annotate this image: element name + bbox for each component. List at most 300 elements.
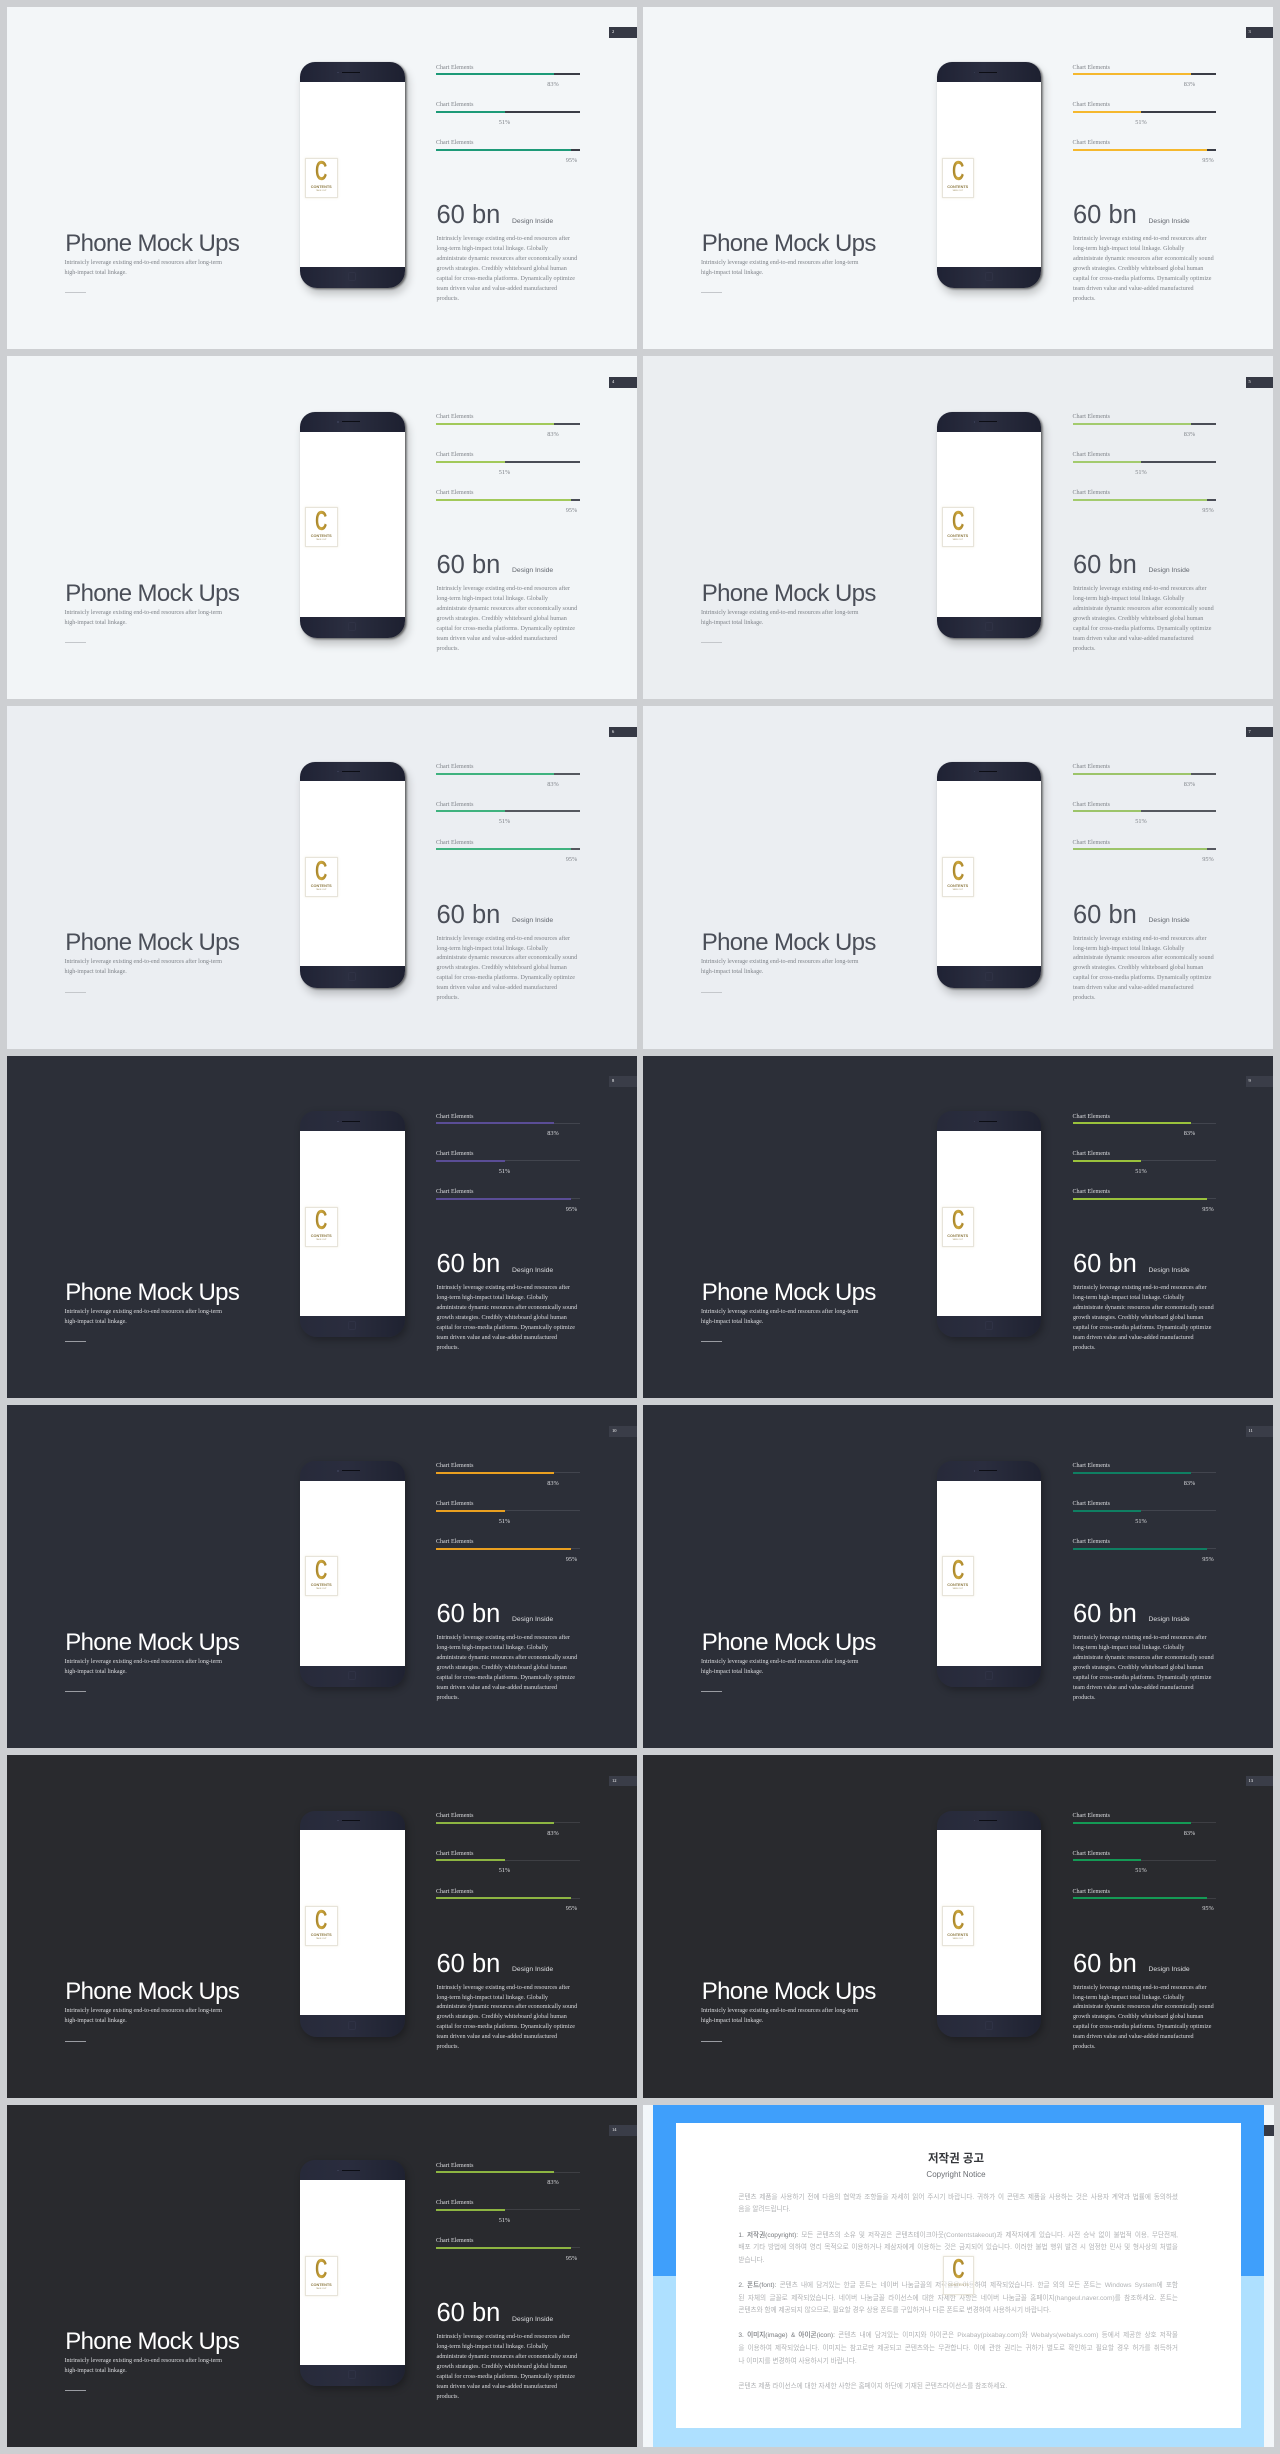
body text: team driven value and value-added manufactured [436, 636, 557, 642]
body text: Intrinsicly leverage existing end-to-end resources after [436, 1635, 570, 1641]
page number [1246, 1426, 1273, 1437]
logo: C [952, 155, 964, 186]
logo: C [315, 1204, 327, 1235]
bar chart: 83% [547, 2179, 559, 2186]
logo: TAKE OUT [316, 1239, 327, 1241]
bar chart: Chart Elements [1072, 414, 1110, 420]
body text [436, 2334, 578, 2400]
bar chart: 95% [1202, 507, 1214, 514]
body text: products. [436, 646, 459, 652]
body text [1073, 1284, 1214, 1351]
bar chart: Chart Elements [1072, 1463, 1110, 1469]
bar chart: Chart Elements [1072, 1889, 1110, 1895]
logo: TAKE OUT [316, 889, 327, 891]
logo: CONTENTS [311, 2283, 332, 2287]
subtitle: Intrinsicly leverage existing end-to-end resources after long-term [64, 1309, 222, 1315]
logo: C [315, 1554, 327, 1585]
logo: C [952, 854, 964, 886]
stat value: 60 bn [1073, 551, 1137, 579]
phone mockup [936, 1111, 1041, 1337]
bar chart: 83% [547, 1130, 559, 1137]
stat value: 60 bn [436, 2299, 500, 2327]
notice text [738, 2193, 1178, 2390]
notice text: 콘텐츠 제품 라이선스에 대한 자세한 사항은 홈페이지 하단에 기재된 콘텐츠라이선스를 참조하세요. [738, 2383, 1007, 2390]
bar chart: Chart Elements [436, 490, 473, 496]
title: Phone Mock Ups [702, 929, 876, 956]
bar chart: 83% [547, 780, 559, 788]
notice text: 된 자체의 글꼴로 제작되었습니다. 네이버 나눔글꼴 라이선스에 대한 자세한 사항은 네이버 나눔글꼴 홈페이지(hangeul.naver.com)를 참조하세요. 폰트는 [738, 2295, 1178, 2302]
page number: 6 [612, 729, 614, 734]
bar chart: Chart Elements [1072, 840, 1110, 846]
bar chart: 95% [566, 856, 577, 863]
stat value: 60 bn [1073, 1250, 1137, 1278]
bar chart: 95% [566, 1556, 577, 1563]
subtitle [701, 958, 858, 975]
body text: growth strategies. Credibly whiteboard global human [1073, 616, 1203, 622]
stat label: Design Inside [512, 567, 553, 574]
bar chart [1072, 64, 1216, 164]
body text: products. [436, 296, 459, 302]
body text: Intrinsicly leverage existing end-to-end resources after [436, 2334, 570, 2340]
phone mockup [936, 1811, 1041, 2037]
bar chart: 51% [499, 119, 510, 126]
bar chart: Chart Elements [436, 140, 473, 146]
body text: long-term high-impact total linkage. Globally [436, 1295, 548, 1301]
title: Phone Mock Ups [65, 929, 239, 956]
title: Phone Mock Ups [65, 580, 239, 607]
bar chart: Chart Elements [436, 1151, 473, 1157]
bar chart: Chart Elements [436, 102, 473, 108]
subtitle: high-impact total linkage. [701, 969, 763, 975]
bar chart [436, 414, 580, 514]
notice text: 배포 기타 방법에 의하여 영리 목적으로 이용하거나 제삼자에게 이용하는 것은 금지되어 있습니다. 이러한 불법 행위 발견 시 엄정한 민사 및 형사상의 처벌을 [738, 2244, 1178, 2251]
logo [943, 2256, 974, 2295]
stat label: Design Inside [1148, 1267, 1190, 1274]
body text: capital for cross-media platforms. Dynamically optimize [1073, 2024, 1211, 2030]
bar chart: Chart Elements [436, 414, 473, 420]
title: Phone Mock Ups [702, 230, 876, 257]
body text: products. [436, 2044, 459, 2050]
logo: CONTENTS [311, 185, 332, 189]
stat label: Design Inside [1148, 917, 1190, 924]
subtitle: high-impact total linkage. [64, 2368, 127, 2374]
logo [942, 857, 974, 897]
bar chart: 83% [547, 1480, 559, 1487]
logo: TAKE OUT [316, 1588, 327, 1590]
body text: capital for cross-media platforms. Dynamically optimize [1073, 626, 1211, 632]
logo: TAKE OUT [952, 889, 963, 891]
bar chart: Chart Elements [1072, 490, 1110, 496]
bar chart: 83% [1184, 431, 1195, 438]
body text: team driven value and value-added manufactured [1073, 286, 1194, 292]
bar chart: 95% [1202, 1905, 1214, 1912]
logo: C [315, 155, 327, 186]
logo: CONTENTS [311, 1583, 332, 1587]
panel: slide 8 dark purple [6, 1056, 636, 1398]
logo: CONTENTS [947, 1933, 968, 1937]
logo: C [952, 1554, 964, 1585]
phone mockup [300, 1461, 404, 1687]
bar chart: 83% [1184, 81, 1195, 88]
body text: team driven value and value-added manufactured [1073, 1685, 1194, 1691]
subtitle: Intrinsicly leverage existing end-to-end resources after long-term [64, 610, 222, 616]
notice text: 1. 저작권(copyright): 모든 콘텐츠의 소유 및 저작권은 콘텐츠테이크아웃(Contentstakeout)과 제작자에게 있습니다. 사전 승낙 없이 불법적 이용, 무단전재, [738, 2232, 1178, 2239]
stat label: Design Inside [512, 2316, 553, 2323]
subtitle: Intrinsicly leverage existing end-to-end resources after long-term [701, 1659, 858, 1665]
bar chart: Chart Elements [1072, 1813, 1110, 1819]
title: Phone Mock Ups [65, 1629, 239, 1656]
page number: 11 [1248, 1428, 1253, 1433]
subtitle [701, 260, 858, 276]
page number: 3 [1248, 29, 1251, 34]
body text: long-term high-impact total linkage. Globally [436, 1995, 548, 2001]
page number [609, 1076, 636, 1087]
logo [305, 2256, 338, 2296]
body text: long-term high-impact total linkage. Globally [1073, 246, 1184, 252]
subtitle: Intrinsicly leverage existing end-to-end resources after long-term [64, 260, 222, 266]
subtitle: Intrinsicly leverage existing end-to-end resources after long-term [64, 2358, 222, 2364]
logo: TAKE OUT [952, 1239, 963, 1241]
logo: C [315, 505, 327, 536]
phone mockup [300, 1111, 404, 1337]
logo: TAKE OUT [952, 190, 963, 192]
bar chart: Chart Elements [436, 65, 473, 71]
panel: slide 14 charcoal lime [6, 2105, 636, 2447]
stat label: Design Inside [1148, 567, 1190, 574]
subtitle [64, 2008, 222, 2024]
stat value: 60 bn [436, 1600, 500, 1628]
subtitle: Intrinsicly leverage existing end-to-end resources after long-term [701, 1309, 858, 1315]
body text: administrate dynamic resources after economically sound [1073, 1655, 1214, 1661]
bar chart: Chart Elements [1072, 102, 1110, 108]
subtitle: high-impact total linkage. [701, 2018, 763, 2024]
bar chart: 51% [1135, 119, 1147, 126]
blue band top [653, 2105, 1264, 2276]
body text: products. [436, 1345, 459, 1351]
bar chart: 51% [499, 1168, 510, 1175]
bar chart [436, 1114, 580, 1213]
phone mockup [936, 1461, 1041, 1687]
bar chart: Chart Elements [436, 802, 473, 808]
body text: products. [436, 995, 459, 1001]
logo: C [952, 1904, 964, 1934]
body text: capital for cross-media platforms. Dynamically optimize [436, 276, 575, 282]
body text: long-term high-impact total linkage. Globally [436, 2344, 548, 2350]
notice text: 받습니다. [738, 2257, 764, 2264]
body text: administrate dynamic resources after economically sound [436, 2354, 577, 2360]
body text: administrate dynamic resources after economically sound [1073, 606, 1214, 612]
body text [436, 1634, 578, 1701]
bar chart: 95% [566, 507, 577, 514]
page number [1246, 1776, 1273, 1786]
logo: TAKE OUT [952, 539, 963, 541]
subtitle: Intrinsicly leverage existing end-to-end resources after long-term [64, 2008, 222, 2014]
page number [1246, 727, 1273, 737]
notice text: 을 이용하여 제작되었습니다. 이미지는 참고로만 제공되고 콘텐츠와는 무관합니다. 이에 관한 권리는 귀하가 별도로 확인하고 필요할 경우 허가를 취득하거 [738, 2345, 1178, 2352]
subtitle: high-impact total linkage. [701, 620, 763, 626]
body text: administrate dynamic resources after economically sound [436, 1305, 577, 1311]
body text: Intrinsicly leverage existing end-to-end resources after [436, 1285, 570, 1291]
body text: products. [436, 1695, 459, 1701]
bar chart: 51% [1135, 1867, 1147, 1874]
body text [1073, 936, 1214, 1001]
logo: TAKE OUT [316, 190, 327, 192]
body text: products. [1073, 995, 1096, 1001]
logo: C [952, 1204, 964, 1235]
bar chart: Chart Elements [436, 1889, 473, 1895]
page number: 13 [1248, 1778, 1253, 1783]
body text: growth strategies. Credibly whiteboard global human [436, 2014, 567, 2020]
body text: administrate dynamic resources after economically sound [436, 955, 577, 961]
bar chart: Chart Elements [436, 452, 473, 458]
page number: 9 [1248, 1078, 1251, 1083]
stat value: 60 bn [436, 1250, 500, 1278]
panel: slide 11 dark teal [643, 1405, 1273, 1748]
page number: 5 [1248, 379, 1251, 384]
logo [942, 1906, 974, 1946]
body text: capital for cross-media platforms. Dynamically optimize [436, 975, 575, 981]
subtitle: high-impact total linkage. [64, 1319, 127, 1325]
body text [436, 1984, 578, 2050]
logo [942, 507, 974, 547]
panel: slide 5 light lime [643, 356, 1273, 699]
panel: slide 9 dark lime [643, 1056, 1273, 1398]
bar chart: 51% [499, 1867, 510, 1874]
page number: 4 [612, 379, 614, 384]
bar chart: 83% [547, 431, 559, 438]
body text: capital for cross-media platforms. Dynamically optimize [436, 2024, 575, 2030]
body text: team driven value and value-added manufactured [1073, 636, 1194, 642]
body text [1073, 1984, 1214, 2050]
body text: capital for cross-media platforms. Dynamically optimize [436, 1325, 575, 1331]
body text: Intrinsicly leverage existing end-to-end resources after [436, 1985, 570, 1991]
body text: team driven value and value-added manufactured [1073, 985, 1194, 991]
body text: Intrinsicly leverage existing end-to-end resources after [436, 236, 570, 242]
bar chart [1072, 1462, 1216, 1563]
body text: growth strategies. Credibly whiteboard global human [436, 1315, 567, 1321]
subtitle: Intrinsicly leverage existing end-to-end resources after long-term [64, 1659, 222, 1665]
body text: capital for cross-media platforms. Dynamically optimize [436, 2374, 575, 2380]
body text: administrate dynamic resources after economically sound [1073, 2004, 1214, 2010]
stat label: Design Inside [512, 218, 553, 225]
page number: 10 [612, 1428, 616, 1433]
bar chart: 83% [1184, 1830, 1195, 1836]
body text: Intrinsicly leverage existing end-to-end resources after [436, 586, 570, 592]
bar chart: 95% [566, 1206, 577, 1213]
logo [305, 158, 338, 198]
panel: slide 2 green [6, 7, 636, 349]
body text: products. [1073, 1695, 1096, 1701]
body text: Intrinsicly leverage existing end-to-end resources after [1073, 936, 1207, 942]
bar chart [436, 64, 580, 164]
body text: growth strategies. Credibly whiteboard global human [436, 616, 567, 622]
body text: team driven value and value-added manufactured [436, 2384, 557, 2390]
page number: 7 [1248, 729, 1251, 734]
body text: products. [1073, 646, 1096, 652]
body text: team driven value and value-added manufactured [436, 1335, 557, 1341]
logo [305, 857, 338, 897]
body text: long-term high-impact total linkage. Globally [1073, 1295, 1184, 1301]
body text: long-term high-impact total linkage. Globally [436, 596, 548, 602]
body text: growth strategies. Credibly whiteboard global human [1073, 1665, 1203, 1671]
logo: CONTENTS [948, 2283, 969, 2287]
bar chart: Chart Elements [1072, 1851, 1110, 1857]
stat value: 60 bn [436, 900, 500, 928]
body text: growth strategies. Credibly whiteboard global human [1073, 1315, 1203, 1321]
body text: team driven value and value-added manufactured [436, 286, 557, 292]
notice text: 나 이미지를 변경하여 사용하시기 바랍니다. [738, 2358, 857, 2365]
bar chart: 95% [1202, 856, 1214, 863]
stat value: 60 bn [1073, 201, 1137, 229]
body text [436, 936, 577, 1001]
logo: CONTENTS [311, 534, 332, 538]
subtitle: high-impact total linkage. [64, 620, 127, 626]
title: Phone Mock Ups [65, 230, 239, 257]
stat label: Design Inside [1148, 1966, 1190, 1973]
logo: TAKE OUT [952, 1588, 963, 1590]
body text: team driven value and value-added manufactured [1073, 1335, 1194, 1341]
body text [1073, 1634, 1214, 1701]
body text: growth strategies. Credibly whiteboard global human [1073, 965, 1203, 971]
bar chart: 95% [566, 2255, 577, 2262]
notice text: 콘텐츠 제품을 사용하기 전에 다음의 협약과 조항들을 자세히 읽어 주시기 바랍니다. 귀하가 이 콘텐츠 제품을 사용하는 것은 사용자 계약과 법률에 동의하셨 [738, 2194, 1178, 2201]
phone mockup [300, 2160, 404, 2386]
bar chart: Chart Elements [1072, 140, 1110, 146]
bar chart: 95% [566, 157, 577, 164]
body text: administrate dynamic resources after economically sound [436, 256, 577, 262]
subtitle: high-impact total linkage. [64, 1669, 127, 1675]
body text: administrate dynamic resources after economically sound [1073, 256, 1214, 262]
bar chart: 95% [1202, 157, 1214, 164]
body text: Intrinsicly leverage existing end-to-end resources after [1073, 1985, 1207, 1991]
bar chart: 83% [1184, 780, 1195, 788]
page number [609, 1426, 636, 1437]
bar chart: 83% [1184, 1480, 1195, 1487]
body text: growth strategies. Credibly whiteboard global human [436, 965, 567, 971]
body text: long-term high-impact total linkage. Globally [436, 1645, 548, 1651]
subtitle [701, 610, 858, 626]
logo: CONTENTS [311, 1234, 332, 1238]
bar chart: Chart Elements [1072, 1501, 1110, 1507]
subtitle [64, 260, 222, 276]
page number [609, 2125, 636, 2136]
stat label: Design Inside [512, 917, 553, 924]
bar chart [436, 1812, 580, 1912]
bar chart: Chart Elements [1072, 1151, 1110, 1157]
subtitle: Intrinsicly leverage existing end-to-end resources after long-term [701, 2008, 858, 2014]
stat value: 60 bn [436, 201, 500, 229]
stat value: 60 bn [436, 1950, 500, 1978]
bar chart: Chart Elements [436, 764, 473, 770]
body text [436, 586, 578, 652]
subtitle [64, 2358, 222, 2374]
bar chart: 51% [499, 469, 510, 476]
body text: Intrinsicly leverage existing end-to-end resources after [1073, 1635, 1207, 1641]
body text: administrate dynamic resources after economically sound [436, 2004, 577, 2010]
logo: C [315, 2253, 327, 2284]
logo: CONTENTS [947, 884, 968, 888]
bar chart: Chart Elements [1072, 1539, 1110, 1545]
bar chart [1072, 1812, 1216, 1912]
body text: administrate dynamic resources after economically sound [1073, 1305, 1214, 1311]
logo [942, 1207, 974, 1247]
body text [436, 1284, 578, 1351]
panel: slide 3 yellow [643, 7, 1273, 349]
body text: growth strategies. Credibly whiteboard global human [436, 1665, 567, 1671]
bar chart: 51% [499, 1518, 510, 1525]
panel: slide 6 green [6, 706, 636, 1049]
body text: long-term high-impact total linkage. Globally [1073, 946, 1184, 952]
stat value: 60 bn [1073, 1600, 1137, 1628]
notice text: 2. 폰트(font): 콘텐츠 내에 담겨있는 한글 폰트는 네이버 나눔글꼴의 저작물을 이용하여 제작되었습니다. 한글 외의 모든 폰트는 Windows System에 포함 [738, 2282, 1178, 2289]
page number [1246, 27, 1273, 38]
body text: Intrinsicly leverage existing end-to-end resources after [436, 936, 570, 942]
body text: growth strategies. Credibly whiteboard global human [436, 266, 567, 272]
bar chart [1072, 414, 1216, 514]
body text: long-term high-impact total linkage. Globally [1073, 1645, 1184, 1651]
title: Phone Mock Ups [65, 1978, 239, 2005]
panel: slide 12 charcoal lime [6, 1755, 636, 2098]
page number: 14 [612, 2127, 616, 2132]
body text: team driven value and value-added manufactured [436, 2034, 557, 2040]
body text: long-term high-impact total linkage. Globally [436, 246, 548, 252]
subtitle [701, 1308, 858, 1325]
bar chart: 83% [1184, 1130, 1195, 1137]
page number: 8 [612, 1078, 614, 1083]
title: Phone Mock Ups [702, 1629, 876, 1656]
bar chart: 95% [566, 1905, 577, 1912]
stat label: Design Inside [1148, 1616, 1190, 1623]
subtitle: high-impact total linkage. [64, 2018, 127, 2024]
bar chart [1072, 1114, 1216, 1213]
body text: Intrinsicly leverage existing end-to-end resources after [1073, 236, 1207, 242]
title: Phone Mock Ups [65, 1279, 239, 1306]
panel: slide 10 dark orange [6, 1405, 636, 1748]
bar chart: Chart Elements [1072, 452, 1110, 458]
bar chart: 83% [547, 81, 559, 88]
body text: capital for cross-media platforms. Dynamically optimize [436, 626, 575, 632]
bar chart: Chart Elements [436, 840, 473, 846]
logo: C [952, 2253, 965, 2284]
logo: TAKE OUT [316, 539, 327, 541]
subtitle [701, 1658, 858, 1675]
subtitle [64, 958, 222, 975]
page number: 12 [612, 1778, 616, 1783]
subtitle [64, 610, 222, 626]
page number [609, 377, 636, 388]
bar chart: Chart Elements [436, 2163, 473, 2169]
bar chart: Chart Elements [1072, 764, 1110, 770]
body text: long-term high-impact total linkage. Globally [1073, 1995, 1184, 2001]
body text: capital for cross-media platforms. Dynamically optimize [436, 1675, 575, 1681]
bar chart: Chart Elements [1072, 1189, 1110, 1195]
body text: growth strategies. Credibly whiteboard global human [436, 2364, 567, 2370]
page number [609, 727, 636, 737]
logo: TAKE OUT [952, 1938, 963, 1940]
phone mockup [300, 762, 404, 988]
title: Phone Mock Ups [702, 1279, 876, 1306]
bar chart [436, 764, 580, 863]
white notice card [676, 2123, 1241, 2428]
notice text: 콘텐츠와 함께 제공되지 않으므로, 필요할 경우 상용 폰트를 구입하거나 다른 폰트로 변경하여 사용하시기 바랍니다. [738, 2307, 1051, 2314]
logo: CONTENTS [947, 185, 968, 189]
body text: Intrinsicly leverage existing end-to-end resources after [1073, 1285, 1207, 1291]
bar chart: Chart Elements [436, 1114, 473, 1120]
page number [1264, 2125, 1274, 2136]
bar chart: Chart Elements [1072, 1114, 1110, 1120]
title: Phone Mock Ups [702, 1978, 876, 2005]
logo: CONTENTS [947, 1583, 968, 1587]
